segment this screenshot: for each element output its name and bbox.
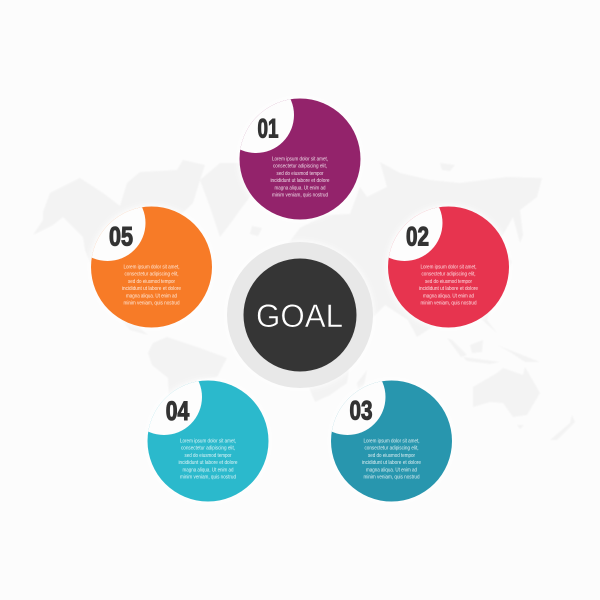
body text: Lorem ipsum dolor sit amet, <box>272 156 328 162</box>
number 04: 04 <box>166 396 189 426</box>
cyan disc <box>148 380 268 502</box>
world map <box>33 160 575 470</box>
body text: sed do eiusmod tempor <box>128 279 175 285</box>
outer ring <box>227 242 373 388</box>
white corner tab <box>240 99 294 153</box>
white corner tab <box>148 381 202 435</box>
purple disc <box>240 98 360 220</box>
orange disc <box>91 206 212 328</box>
body text: minim veniam, quis nostrud <box>180 474 236 480</box>
body text: magna aliqua. Ut enim ad <box>366 467 417 473</box>
body text: minim veniam, quis nostrud <box>364 474 420 480</box>
white corner tab <box>388 207 442 261</box>
teal disc <box>331 380 452 502</box>
goal label: GOAL <box>256 298 343 334</box>
body text: minim veniam, quis nostrud <box>272 192 328 198</box>
body text: consectetur adipiscing elit, <box>273 164 327 170</box>
panel: 02 <box>388 206 509 328</box>
body text <box>178 438 238 480</box>
center goal circle <box>227 242 373 388</box>
body text: magna aliqua. Ut enim ad <box>423 293 474 299</box>
body text <box>362 438 421 480</box>
body text: magna aliqua. Ut enim ad <box>126 293 177 299</box>
number 05: 05 <box>109 222 133 252</box>
body text: minim veniam, quis nostrud <box>420 300 477 306</box>
panel: 04 <box>148 380 268 502</box>
body text: incididunt ut labore et dolore <box>362 460 421 466</box>
soft white halos behind discs <box>90 97 510 503</box>
body text: incididunt ut labore et dolore <box>178 460 238 466</box>
panel: 05 <box>91 206 212 328</box>
number 01: 01 <box>258 114 278 144</box>
body text: sed do eiusmod tempor <box>184 453 232 459</box>
body text: minim veniam, quis nostrud <box>124 300 180 306</box>
body text: incididunt ut labore et dolore <box>419 286 478 292</box>
body text: consectetur adipiscing elit, <box>124 272 178 278</box>
body text: incididunt ut labore et dolore <box>122 286 181 292</box>
panel: 03 <box>331 380 452 502</box>
body text: Lorem ipsum dolor sit amet, <box>124 264 180 270</box>
body text: consectetur adipiscing elit, <box>364 446 418 452</box>
body text: incididunt ut labore et dolore <box>270 178 330 184</box>
number 02: 02 <box>406 222 429 252</box>
body text: Lorem ipsum dolor sit amet, <box>364 438 420 444</box>
body text <box>270 156 330 198</box>
body text: consectetur adipiscing elit, <box>181 446 235 452</box>
body text: Lorem ipsum dolor sit amet, <box>420 264 476 270</box>
inner dark disc <box>244 258 356 372</box>
body text: sed do eiusmod tempor <box>368 453 415 459</box>
red disc <box>388 206 509 328</box>
body text: magna aliqua. Ut enim ad <box>274 185 326 191</box>
body text <box>122 264 181 306</box>
number 03: 03 <box>350 396 372 426</box>
body text: sed do eiusmod tempor <box>276 171 324 177</box>
body text: sed do eiusmod tempor <box>425 279 472 285</box>
body text: consectetur adipiscing elit, <box>422 272 476 278</box>
white corner tab <box>332 381 386 435</box>
body text <box>419 264 478 306</box>
panel: 01 <box>240 98 360 220</box>
white corner tab <box>92 207 146 261</box>
body text: Lorem ipsum dolor sit amet, <box>180 438 236 444</box>
body text: magna aliqua. Ut enim ad <box>182 467 234 473</box>
